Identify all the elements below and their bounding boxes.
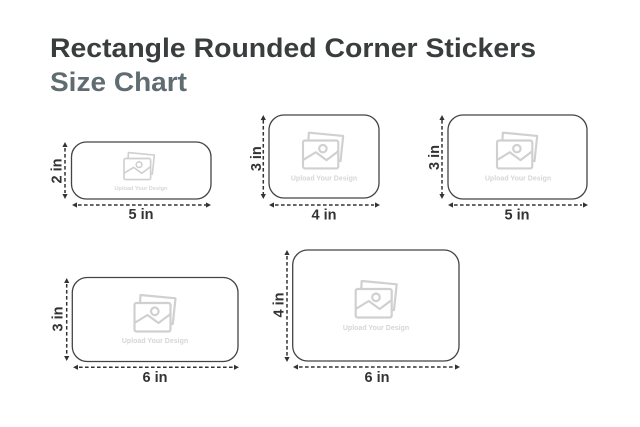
- panel: 6 x 3 in sticker: Upload Your Design: [122, 338, 188, 345]
- panel: 5 x 3 in sticker: [427, 115, 588, 223]
- subtitle: Size Chart: [50, 67, 187, 97]
- panel: 4 x 3 in sticker: 4 in: [312, 207, 336, 223]
- panel: 5 x 3 in sticker: Upload Your Design: [485, 176, 551, 183]
- panel: 6 x 3 in sticker: [51, 278, 239, 386]
- panel: 4 x 3 in sticker: Upload Your Design: [291, 176, 357, 183]
- panel: 6 x 4 in sticker: Upload Your Design: [343, 325, 409, 332]
- panel: 6 x 3 in sticker: 3 in: [51, 307, 67, 331]
- panel: 6 x 4 in sticker: 6 in: [365, 370, 389, 386]
- panel: 5 x 2 in sticker: 5 in: [129, 207, 153, 223]
- panel: 5 x 2 in sticker: Upload Your Design: [115, 186, 168, 192]
- panel: 5 x 3 in sticker: 5 in: [505, 207, 529, 223]
- panel: 6 x 3 in sticker: 6 in: [143, 370, 167, 386]
- panel: 5 x 2 in sticker: [50, 142, 211, 223]
- panel: 4 x 3 in sticker: [249, 115, 380, 223]
- panel: 5 x 3 in sticker: 3 in: [427, 145, 443, 170]
- title: Rectangle Rounded Corner Stickers: [50, 33, 536, 63]
- panel: 6 x 4 in sticker: 4 in: [271, 293, 287, 317]
- panel: 5 x 2 in sticker: 2 in: [50, 159, 66, 183]
- panel: 4 x 3 in sticker: 3 in: [249, 146, 265, 171]
- panel: 6 x 4 in sticker: [271, 250, 460, 386]
